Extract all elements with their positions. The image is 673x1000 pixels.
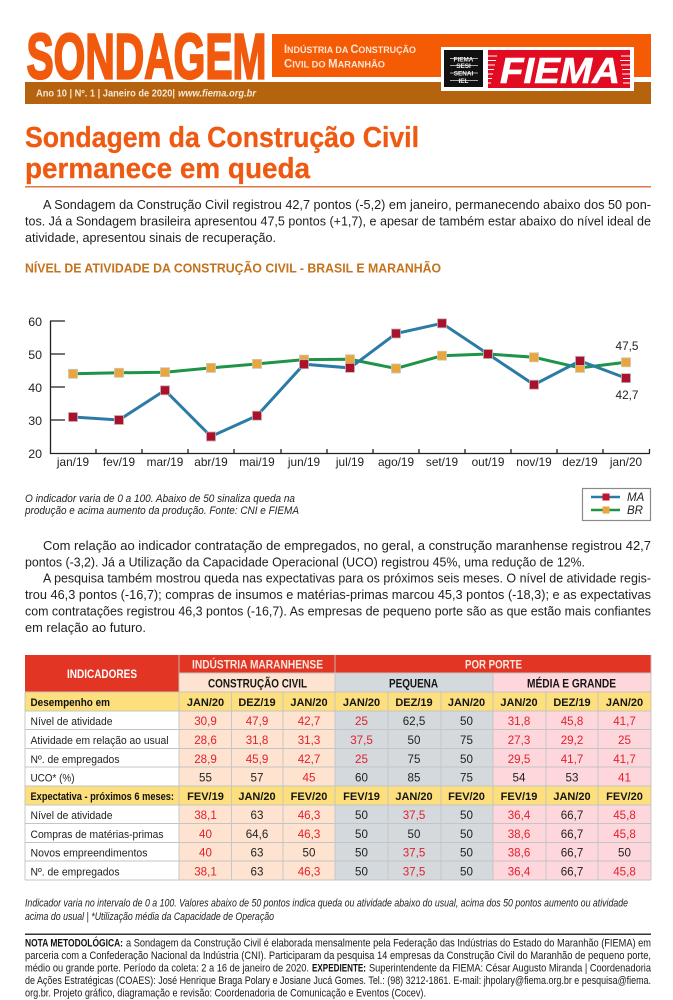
row: Nº. de empregados (expectativa): 46,3 (298, 866, 320, 878)
row: Compras de matérias-primas: 50 (408, 828, 420, 841)
row: Novos empreendimentos: 40 (199, 846, 212, 860)
row: UCO: 55 (199, 772, 212, 784)
row: Atividade em relação ao usual: Atividade em relação ao usual (30, 735, 168, 747)
body paragraphs (25, 538, 651, 635)
orange banner (272, 34, 651, 77)
y axis labels: 50 (28, 348, 42, 362)
FIEMA logo (441, 47, 634, 91)
row: UCO: 75 (460, 772, 473, 784)
data table (25, 655, 651, 880)
header row: sectors: CONSTRUÇÃO CIVIL (208, 678, 307, 690)
row: Expectativa: Expectativa - próximos 6 meses: (30, 791, 174, 803)
body paragraphs: A pesquisa também mostrou queda nas expectativas para os próximos seis meses. O nível de atividade regis- (43, 570, 651, 586)
row: Nº. de empregados: Nº. de empregados (30, 754, 120, 766)
row: Nº. de empregados (30, 753, 636, 766)
methodological note: org.br. Projeto gráfico, diagramação e revisão: Coordenadoria de Comunicação e Eventos (Cocev). (25, 988, 426, 1000)
row: Nº. de empregados (expectativa): 63 (251, 866, 263, 878)
x axis labels: out/19 (472, 455, 504, 469)
row: UCO: 53 (566, 772, 578, 784)
row: Nível de atividade: 62,5 (403, 715, 425, 728)
row: Novos empreendimentos: 66,7 (561, 846, 583, 860)
row: Nível de atividade: 42,7 (298, 715, 320, 728)
row: Nº. de empregados (expectativa): 50 (460, 866, 473, 878)
x axis labels: jan/20 (609, 455, 643, 469)
row: Desempenho em: JAN/20 (448, 697, 485, 709)
methodological note: EXPEDIENTE: (312, 962, 366, 974)
row: Novos empreendimentos: 37,5 (403, 846, 425, 860)
headline: permanece em queda (25, 153, 311, 185)
row: Atividade em relação ao usual: 50 (408, 734, 420, 747)
x axis labels: jul/19 (335, 455, 364, 469)
FIEMA logo: SESI (456, 63, 471, 70)
row: Compras de matérias-primas: 66,7 (561, 828, 583, 841)
intro paragraph: tos. Já a Sondagem brasileira apresentou 47,5 pontos (+1,7), e apesar de também estar abaixo do nível ideal de (25, 214, 651, 228)
row: Novos empreendimentos: 63 (251, 846, 263, 860)
FIEMA logo: IEL (459, 78, 469, 85)
FIEMA logo: FIEMA (500, 50, 620, 91)
row: UCO: 54 (513, 772, 526, 784)
chart source note: produção e acima aumento da produção. Fonte: CNI e FIEMA (24, 505, 299, 517)
row: Nº. de empregados: 41,7 (561, 753, 583, 766)
row: Atividade em relação ao usual: 27,3 (508, 734, 530, 747)
row: Novos empreendimentos: Novos empreendimentos (30, 848, 148, 860)
row: UCO (30, 772, 631, 784)
row: Expectativa (30, 791, 643, 803)
row: Atividade em relação ao usual: 37,5 (350, 734, 373, 747)
row: Nível de atividade (expectativa): 63 (251, 809, 263, 822)
row: UCO: 60 (355, 772, 368, 784)
row: Nível de atividade (expectativa): 36,4 (508, 809, 531, 822)
table backgrounds (25, 655, 651, 880)
x axis labels: nov/19 (516, 455, 552, 469)
x axis labels (56, 455, 643, 469)
header row: sectors: PEQUENA (389, 678, 438, 690)
row: Desempenho em: DEZ/19 (553, 697, 591, 709)
row: Nível de atividade: 25 (355, 715, 368, 728)
row: Nº. de empregados: 29,5 (508, 753, 530, 766)
headline: Sondagem da Construção Civil (25, 122, 419, 154)
row: Expectativa: JAN/20 (238, 791, 276, 803)
row: Desempenho em: Desempenho em (30, 697, 110, 709)
row: Nível de atividade: 31,8 (508, 715, 530, 728)
end value label: MA 42,7: 42,7 (616, 388, 638, 402)
row: Compras de matérias-primas: 50 (355, 828, 368, 841)
x axis labels: jan/19 (56, 455, 89, 469)
chart heading: NÍVEL DE ATIVIDADE DA CONSTRUÇÃO CIVIL - BRASIL E MARANHÃO (25, 260, 441, 276)
row: Nível de atividade (expectativa): 66,7 (561, 809, 583, 822)
header row: groups: INDÚSTRIA MARANHENSE (192, 658, 323, 672)
chart legend (582, 488, 650, 520)
row: Compras de matérias-primas: 50 (460, 828, 473, 841)
row: UCO: 41 (618, 772, 631, 784)
row: Nº. de empregados (expectativa): 45,8 (613, 866, 636, 878)
edition line: www.fiema.org.br (178, 88, 257, 100)
row: Compras de matérias-primas: 45,8 (613, 828, 636, 841)
row: Expectativa: JAN/20 (395, 791, 433, 803)
row: Atividade em relação ao usual: 31,8 (246, 734, 268, 747)
intro paragraph: A Sondagem da Construção Civil registrou 42,7 pontos (-5,2) em janeiro, permanecendo abaixo dos 50 pon- (43, 197, 651, 212)
row: Desempenho em: JAN/20 (187, 697, 224, 709)
row: Nível de atividade (expectativa) (30, 809, 636, 822)
FIEMA logo: FIEMA (454, 56, 474, 64)
x axis labels: abr/19 (194, 455, 228, 469)
header row: groups: INDICADORES (67, 669, 137, 681)
chart source note: O indicador varia de 0 a 100. Abaixo de 50 sinaliza queda na (25, 493, 295, 505)
row: UCO: 85 (408, 772, 420, 784)
x axis labels: mar/19 (147, 455, 183, 469)
row: Atividade em relação ao usual (30, 734, 631, 747)
banner subtitle: INDÚSTRIA DA CONSTRUÇÃO (284, 44, 416, 56)
row: Novos empreendimentos: 50 (355, 846, 368, 860)
body paragraphs: Com relação ao indicador contratação de empregados, no geral, a construção maranhense registrou 42,7 (43, 538, 651, 553)
row: Desempenho em (30, 697, 643, 709)
row: Novos empreendimentos (30, 846, 631, 860)
row: UCO: 57 (251, 772, 263, 784)
intro paragraph: atividade, apresentou sinais de recuperação. (25, 230, 276, 245)
body paragraphs: pontos (-3,2). Já a Utilização da Capacidade Operacional (UCO) registrou 45%, uma redução de 12%. (25, 554, 585, 570)
row: Nº. de empregados (expectativa): Nº. de empregados (30, 866, 120, 878)
row: Compras de matérias-primas: Compras de matérias-primas (30, 829, 164, 841)
x axis labels: ago/19 (378, 455, 414, 469)
chart source note (24, 493, 299, 517)
intro paragraph (25, 197, 651, 245)
body paragraphs: com contratações registrou 46,3 pontos (-16,7). As empresas de pequeno porte são as que estão mais confiantes (25, 604, 651, 618)
row: Nível de atividade: 45,8 (561, 715, 583, 728)
row: Nº. de empregados: 45,9 (246, 753, 268, 766)
FIEMA logo: SENAI (454, 70, 473, 78)
methodological note: médio ou grande porte. Período da coleta: 2 a 16 de janeiro de 2020. (25, 962, 309, 974)
series: MA (68, 319, 630, 441)
line chart (28, 315, 650, 469)
row: Atividade em relação ao usual: 31,3 (298, 734, 320, 747)
row: Expectativa: FEV/20 (448, 791, 485, 803)
y axis labels: 30 (28, 414, 42, 428)
row: Nível de atividade (expectativa): Nível de atividade (30, 810, 112, 822)
row: UCO: 45 (303, 772, 315, 784)
row: Expectativa: FEV/19 (343, 791, 380, 803)
row: Nível de atividade: Nível de atividade (30, 716, 112, 728)
header row: sectors: MÉDIA E GRANDE (527, 678, 616, 690)
brown edition bar (25, 82, 651, 104)
row: Nº. de empregados: 28,9 (194, 753, 217, 766)
row: Desempenho em: DEZ/19 (238, 697, 276, 709)
body paragraphs: em relação ao futuro. (25, 620, 146, 635)
row: Nível de atividade: 41,7 (613, 715, 636, 728)
row: Atividade em relação ao usual: 28,6 (194, 734, 217, 747)
headline (25, 122, 419, 185)
row: Novos empreendimentos: 50 (303, 846, 315, 860)
row: Nível de atividade (30, 715, 636, 728)
row: Nível de atividade (expectativa): 37,5 (403, 809, 425, 822)
table footnote: acima do usual | *Utilização média da Capacidade de Operação (25, 911, 274, 923)
edition line: Ano 10 | Nº. 1 | Janeiro de 2020| (36, 88, 175, 100)
row: Expectativa: FEV/20 (606, 791, 643, 803)
row: Expectativa: FEV/19 (187, 791, 224, 803)
body paragraphs: trou 46,3 pontos (-16,7); compras de insumos e matérias-primas marcou 45,3 pontos (-18,3); e as expectativas (25, 587, 651, 602)
row: Compras de matérias-primas: 40 (199, 828, 212, 841)
row: Atividade em relação ao usual: 29,2 (561, 734, 583, 747)
row: Expectativa: FEV/19 (501, 791, 537, 803)
row: Nº. de empregados (expectativa) (30, 866, 636, 878)
row: Atividade em relação ao usual: 25 (618, 734, 631, 747)
y axis labels (28, 315, 42, 461)
row: Nível de atividade (expectativa): 38,1 (194, 809, 217, 822)
row: Nº. de empregados: 75 (408, 753, 420, 766)
y axis labels: 40 (28, 381, 42, 395)
x axis labels: set/19 (426, 455, 458, 469)
header row: groups: POR PORTE (465, 660, 522, 672)
row: Desempenho em: JAN/20 (500, 697, 538, 709)
chart axes (50, 321, 650, 454)
y axis labels: 60 (28, 315, 42, 329)
row: Novos empreendimentos: 38,6 (508, 846, 530, 860)
row: Nível de atividade: 30,9 (194, 715, 217, 728)
row: Nº. de empregados (expectativa): 66,7 (561, 866, 583, 878)
row: Nível de atividade (expectativa): 50 (355, 809, 368, 822)
x axis labels: dez/19 (562, 455, 598, 469)
header row: groups (67, 658, 522, 681)
header row: sectors (208, 678, 616, 690)
row: Atividade em relação ao usual: 75 (460, 734, 473, 747)
row: Compras de matérias-primas (30, 828, 636, 841)
row: Nº. de empregados: 50 (460, 753, 473, 766)
methodological note: NOTA METODOLÓGICA: (25, 936, 123, 950)
row: Expectativa: JAN/20 (553, 791, 591, 803)
row: Expectativa: FEV/20 (291, 791, 327, 803)
row: Desempenho em: JAN/20 (606, 697, 643, 709)
row: Compras de matérias-primas: 38,6 (508, 828, 530, 841)
x axis labels: fev/19 (103, 455, 135, 469)
edition line (36, 88, 257, 100)
banner subtitle (284, 44, 416, 70)
row: Nível de atividade (expectativa): 46,3 (298, 809, 320, 822)
row: Nº. de empregados: 42,7 (298, 753, 320, 766)
chart legend: MA (627, 492, 645, 504)
row: Nº. de empregados (expectativa): 50 (355, 866, 368, 878)
x axis labels: jun/19 (287, 455, 320, 469)
row: Nº. de empregados (expectativa): 36,4 (508, 866, 531, 878)
row: Nº. de empregados: 25 (355, 753, 368, 766)
row: UCO: UCO* (%) (30, 772, 75, 784)
series: BR (68, 350, 630, 378)
row: Novos empreendimentos: 50 (460, 846, 473, 860)
row: Compras de matérias-primas: 46,3 (298, 828, 320, 841)
row: Nº. de empregados (expectativa): 38,1 (194, 866, 217, 878)
row: Nível de atividade (expectativa): 50 (460, 809, 473, 822)
row: Compras de matérias-primas: 64,6 (246, 828, 268, 841)
row: Nível de atividade: 47,9 (246, 715, 268, 728)
row: Desempenho em: DEZ/19 (395, 697, 433, 709)
table footnote (25, 898, 628, 923)
row: Nº. de empregados: 41,7 (613, 753, 636, 766)
chart legend: BR (627, 505, 643, 517)
methodological note (25, 936, 651, 1000)
row: Nº. de empregados (expectativa): 37,5 (403, 866, 425, 878)
row: Desempenho em: JAN/20 (343, 697, 380, 709)
y axis labels: 20 (28, 447, 42, 461)
banner subtitle: CIVIL DO MARANHÃO (284, 58, 385, 70)
row: Novos empreendimentos: 50 (618, 846, 631, 860)
masthead title: SONDAGEM: SONDAGEM (26, 20, 266, 92)
end value label: BR 47,5: 47,5 (616, 339, 639, 353)
row: Desempenho em: JAN/20 (290, 697, 328, 709)
row: Nível de atividade (expectativa): 45,8 (613, 809, 636, 822)
x axis labels: mai/19 (239, 455, 275, 469)
row: Nível de atividade: 50 (460, 715, 473, 728)
masthead header (25, 20, 651, 104)
